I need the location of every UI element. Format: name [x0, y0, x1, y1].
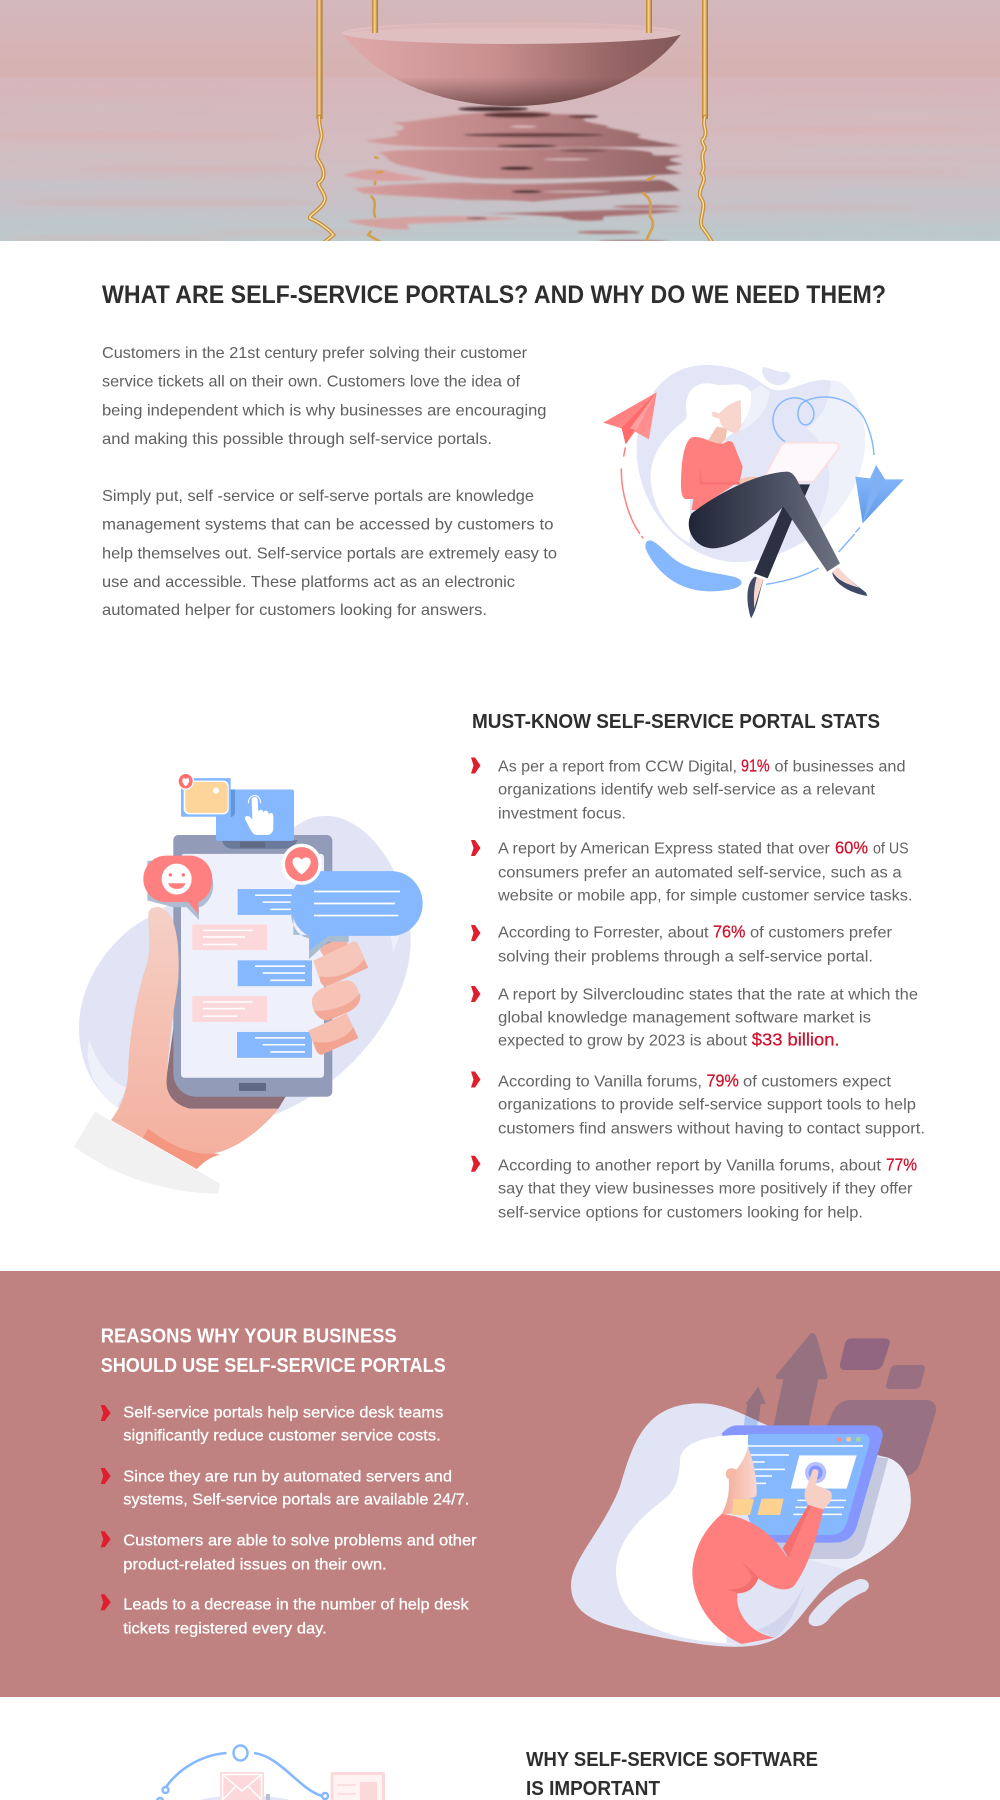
stats list [471, 755, 925, 1221]
neck [708, 427, 727, 444]
reasons heading [101, 1326, 446, 1377]
reason 3: product-related issues on their own. [123, 1556, 387, 1573]
front leg [689, 472, 840, 572]
stat 3: 76%: solving their problems through a self-service portal. [498, 949, 873, 966]
sweater [692, 1505, 823, 1644]
sleeve [74, 1112, 220, 1194]
chat message rows [192, 889, 312, 1058]
stat 1: 91%: organizations identify web self-service as a relevant [498, 782, 876, 799]
sweater shading [728, 1505, 811, 1593]
illustration: woman using touchscreen [571, 1333, 936, 1647]
reason 2 [101, 1468, 469, 1509]
intro text block [102, 345, 557, 619]
inner rod reflections [368, 157, 654, 242]
stat 2: 60%: of US [873, 840, 909, 858]
panel: reasons band [0, 1271, 1000, 1697]
thumb and palm [111, 907, 278, 1169]
reason 4: Leads to a decrease in the number of help desk [123, 1596, 469, 1613]
face [720, 1447, 757, 1515]
stat 2: 60%: website or mobile app, for simple customer service tasks. [497, 888, 912, 904]
background blob [637, 365, 865, 562]
stat 1: 91% [471, 755, 906, 822]
gold rods [310, 0, 712, 242]
illustration: hand holding phone with chat bubbles [74, 773, 423, 1194]
stat 5: 79%: customers find answers without having to contact support. [498, 1120, 925, 1138]
hair [651, 383, 751, 543]
swoosh [809, 1579, 869, 1626]
stat 5: 79% [471, 1070, 925, 1138]
intro text block: management systems that can be accessed by customers to [102, 516, 554, 534]
blob highlight [88, 936, 399, 1107]
smiley bubble shadow [147, 861, 213, 920]
background blob [79, 816, 411, 1124]
inner gold rods [372, 0, 652, 33]
stat 5: 79%: 79% [706, 1070, 739, 1090]
blue bubble shadow [291, 900, 349, 959]
intro text block: being independent which is why businesses are encouraging [102, 402, 546, 420]
screen [722, 1425, 883, 1543]
reason 4 [101, 1594, 469, 1637]
stat 3: 76%: According to Forrester, about [498, 924, 709, 941]
blue dashes [766, 527, 860, 584]
blob light side [807, 1457, 911, 1570]
reason 2: systems, Self-service portals are available 24/7. [123, 1492, 469, 1509]
stat 3: 76% [471, 921, 892, 966]
sweater [681, 437, 743, 510]
right rod reflection [700, 117, 712, 242]
reasons heading: REASONS WHY YOUR BUSINESS [101, 1326, 397, 1348]
pointing hand [805, 1469, 832, 1510]
stat 5: 79%: organizations to provide self-service support tools to help [498, 1097, 916, 1114]
reasons list [101, 1404, 477, 1637]
stat 4: $33 billion: expected to grow by 2023 is about [498, 1032, 748, 1050]
stat 1: 91%: investment focus. [498, 805, 626, 822]
photo card [177, 773, 231, 817]
stat 1: 91%: of businesses and [774, 758, 906, 775]
intro text block: and making this possible through self-service portals. [102, 431, 492, 448]
bottom heading: WHY SELF-SERVICE SOFTWARE [526, 1749, 818, 1771]
stat 6: 77%: 77% [886, 1154, 917, 1174]
phone screen [181, 854, 324, 1078]
stat 6: 77% [471, 1154, 917, 1221]
stat 3: 76%: of customers prefer [750, 924, 892, 941]
mail icon [220, 1772, 270, 1800]
connecting arcs [166, 1753, 322, 1796]
reason 3: Customers are able to solve problems and other [123, 1532, 477, 1549]
lavender base [200, 1795, 290, 1800]
right foot [832, 567, 859, 588]
illustration: woman with laptop between paper planes [603, 365, 904, 618]
small blob [762, 367, 790, 385]
reason 1: significantly reduce customer service costs. [123, 1428, 441, 1445]
stats heading: MUST-KNOW SELF-SERVICE PORTAL STATS [472, 711, 880, 733]
stat 4: $33 billion: $33 billion. [752, 1030, 840, 1050]
stat 6: 77%: According to another report by Vanilla forums, about [498, 1157, 882, 1174]
bottom heading [526, 1749, 818, 1800]
water surface with ripples [0, 77, 1000, 242]
looping dashed line [773, 397, 874, 455]
intro text block: Customers in the 21st century prefer solving their customer [102, 345, 528, 362]
blue bubble [291, 871, 423, 950]
nodes [157, 1746, 328, 1800]
red dashes [621, 447, 643, 538]
hair [616, 1435, 748, 1644]
laptop [762, 443, 839, 482]
stat 2: 60% [471, 838, 912, 904]
blue paper plane [855, 465, 904, 523]
stat 1: 91%: As per a report from CCW Digital, [498, 758, 737, 775]
intro text block: help themselves out. Self-service portals are extremely easy to [102, 546, 557, 562]
laptop base [787, 484, 810, 500]
reason 4: tickets registered every day. [123, 1620, 327, 1637]
stat 5: 79%: of customers expect [743, 1074, 892, 1090]
intro text block: service tickets all on their own. Customers love the idea of [102, 374, 521, 390]
stat 5: 79%: According to Vanilla forums, [498, 1074, 702, 1090]
stat 4: $33 billion: A report by Silvercloudinc states that the rate at which the [498, 986, 918, 1004]
sweater fold [699, 465, 741, 485]
sky [0, 0, 1000, 78]
reason 1 [101, 1404, 444, 1445]
bowl reflection [343, 107, 683, 243]
ear [726, 1468, 737, 1479]
reasons heading: SHOULD USE SELF-SERVICE PORTALS [101, 1355, 446, 1377]
red paper plane [603, 392, 657, 444]
stat 6: 77%: say that they view businesses more positively if they offer [498, 1180, 912, 1198]
intro text block: automated helper for customers looking for answers. [102, 602, 487, 619]
small arrow overlap [744, 1416, 758, 1425]
stat 6: 77%: self-service options for customers looking for help. [498, 1204, 863, 1221]
heart badge [282, 844, 322, 885]
intro text block: use and accessible. These platforms act as an electronic [102, 574, 515, 591]
face [712, 400, 741, 433]
smiley bubble [143, 856, 212, 914]
right shoe [832, 568, 867, 596]
blue swoosh [645, 540, 742, 591]
stat 1: 91%: 91% [741, 755, 770, 775]
stat 4: $33 billion: global knowledge management software market is [498, 1010, 871, 1027]
hand on keyboard [740, 477, 762, 487]
fingers [308, 937, 368, 1055]
left rod reflection [310, 117, 333, 242]
pointer hand icon [245, 797, 273, 835]
lower shadow [757, 1583, 805, 1638]
reason 1: Self-service portals help service desk teams [123, 1404, 444, 1421]
top speaker [222, 840, 298, 849]
lighter wash [737, 381, 865, 540]
main title: WHAT ARE SELF-SERVICE PORTALS? AND WHY DO WE NEED THEM? [102, 281, 886, 309]
left foot [754, 577, 763, 608]
bottom heading: IS IMPORTANT [526, 1778, 660, 1800]
illustration: self-service software (cropped) [157, 1746, 385, 1800]
reason 2: Since they are run by automated servers and [123, 1468, 452, 1485]
stat 2: 60%: consumers prefer an automated self-service, such as a [498, 864, 902, 881]
back leg [754, 500, 800, 578]
home button [239, 1083, 266, 1091]
stat 2: 60%: A report by American Express stated that over [498, 840, 830, 858]
stat 3: 76%: 76% [713, 921, 745, 941]
phone body [173, 835, 332, 1097]
background blob [571, 1403, 911, 1647]
intro text block: Simply put, self -service or self-serve portals are knowledge [102, 488, 534, 505]
growth arrows and tiles [744, 1333, 936, 1477]
tap card [216, 790, 294, 848]
hero image: bowl over water [0, 0, 1000, 243]
stat 2: 60%: 60% [835, 838, 868, 858]
stat 4: $33 billion [471, 986, 918, 1050]
phone shadow [166, 1018, 287, 1109]
palm crease [143, 1129, 220, 1169]
bowl [342, 22, 682, 106]
left shoe [747, 577, 763, 618]
reason 3 [101, 1531, 477, 1573]
screen shadow [773, 1457, 888, 1559]
document icon [331, 1772, 385, 1800]
